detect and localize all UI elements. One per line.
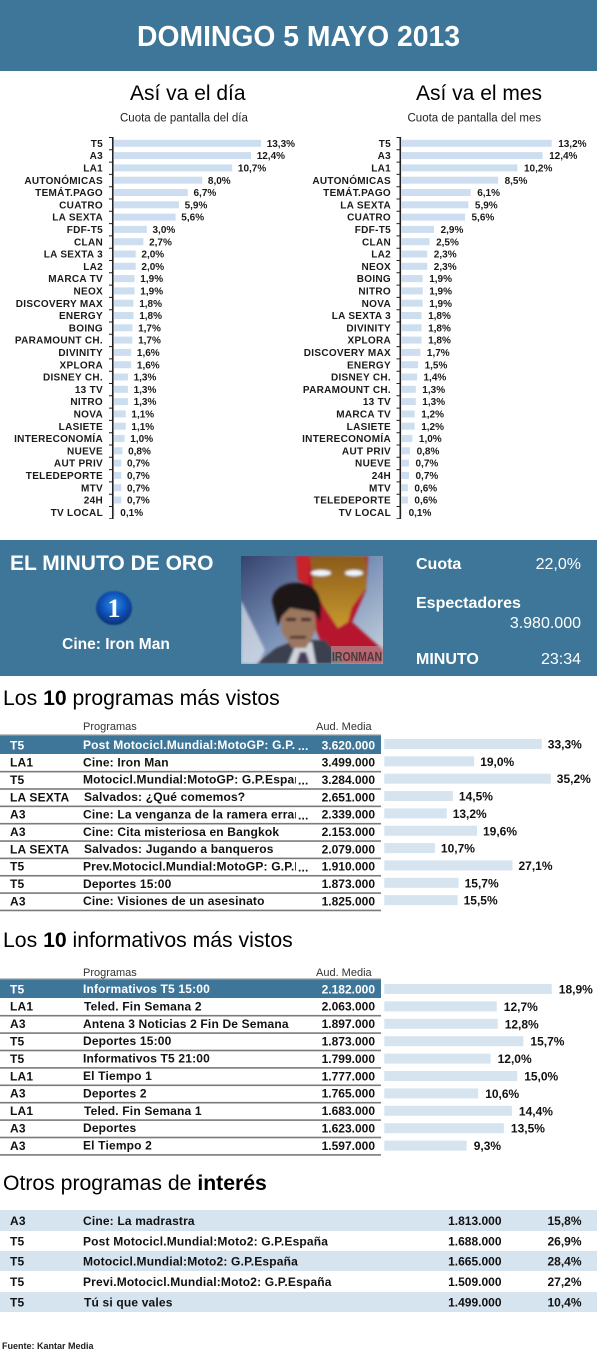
row: T5 <box>10 1254 25 1268</box>
bar chart: mes: TELEDEPORTE <box>314 496 391 507</box>
row <box>10 1234 582 1248</box>
row: Salvados: Jugando a banqueros <box>84 842 274 856</box>
bar chart: mes: TEMÁT.PAGO <box>323 186 391 199</box>
row: 1.910.000 <box>322 860 375 874</box>
row: ... <box>298 808 309 822</box>
row: T5 <box>10 773 25 787</box>
bar chart: día: 1,3% <box>134 373 157 384</box>
bar chart: mes: 1,7% <box>427 348 450 359</box>
bar chart: día: AUTONÓMICAS <box>24 174 103 187</box>
bar chart: mes: PARAMOUNT CH. <box>303 385 391 396</box>
row: T5 <box>10 877 25 891</box>
bar chart: día: 10,7% <box>238 163 266 174</box>
stat: cuota: 22,0% <box>536 556 581 573</box>
bar chart: día: TELEDEPORTE <box>26 471 103 482</box>
row <box>0 1292 597 1312</box>
bar chart: mes: 1,3% <box>422 397 445 408</box>
bar chart: mes: 2,9% <box>441 225 464 236</box>
bar chart: mes: 13 TV <box>363 397 391 408</box>
row: T5 <box>10 1296 25 1310</box>
bar chart: día: 1,1% <box>131 422 154 433</box>
bar chart: día: 13,3% <box>267 139 295 150</box>
row: 13,2% <box>453 807 487 821</box>
bar chart: día: BOING <box>69 323 103 334</box>
bar chart: mes: 2,3% <box>434 250 457 261</box>
row <box>0 824 517 842</box>
highlighted row: Post Motocicl.Mundial:MotoGP: G.P.España <box>83 738 339 752</box>
table: otros programas de interés <box>0 1210 597 1312</box>
bar chart: mes: 1,4% <box>424 373 446 384</box>
row: 1.873.000 <box>322 1034 375 1048</box>
row: 3.284.000 <box>322 773 375 787</box>
row: 2.651.000 <box>322 790 375 804</box>
table header: Aud. Media <box>316 967 373 979</box>
row <box>0 894 498 911</box>
row: Previ.Motocicl.Mundial:Moto2: G.P.España <box>83 1275 332 1289</box>
bar chart: día: PARAMOUNT CH. <box>15 336 103 347</box>
row: 26,9% <box>547 1234 582 1248</box>
icon: La 1 logo <box>96 591 132 625</box>
highlighted row: T5 <box>10 982 25 996</box>
highlighted row: 2.182.000 <box>322 982 375 996</box>
bar chart: día: MTV <box>81 483 103 494</box>
bar chart: mes <box>302 139 587 519</box>
row <box>0 999 538 1016</box>
bar chart: mes: NUEVE <box>355 459 391 470</box>
bar chart: mes: 24H <box>372 471 391 482</box>
row: Tú si que vales <box>84 1296 173 1310</box>
bar chart: mes: 0,6% <box>414 483 437 494</box>
row: Cine: Visiones de un asesinato <box>83 894 265 908</box>
bar chart: mes: 8,5% <box>505 176 528 187</box>
bar chart: día: 5,9% <box>185 200 208 211</box>
bar chart: día: LASIETE <box>59 422 103 433</box>
row: 3.499.000 <box>322 756 375 770</box>
row: 2.079.000 <box>322 842 375 856</box>
row: 15,7% <box>465 876 499 890</box>
bar chart: día: 0,7% <box>127 496 150 507</box>
row: El Tiempo 1 <box>83 1069 152 1083</box>
row: 13,5% <box>511 1122 545 1136</box>
panel: así va el mes <box>302 82 587 519</box>
row: A3 <box>10 1214 26 1228</box>
title banner: DOMINGO 5 MAYO 2013 <box>137 20 460 52</box>
bar chart: mes: 1,3% <box>422 385 445 396</box>
bar chart: mes: 13,2% <box>558 139 587 150</box>
row: 35,2% <box>557 772 591 786</box>
bar chart: mes: 1,0% <box>419 434 442 445</box>
bar chart: día: A3 <box>90 151 103 162</box>
bar chart: día: 0,7% <box>127 483 150 494</box>
bar chart: mes: MTV <box>369 483 391 494</box>
bar chart: día: XPLORA <box>60 360 103 371</box>
highlighted row: Informativos T5 15:00 <box>83 982 210 996</box>
row <box>0 1121 545 1138</box>
stat: cuota: Cuota <box>416 556 461 573</box>
row: A3 <box>10 894 26 908</box>
bar chart: mes: AUTONÓMICAS <box>312 174 391 187</box>
row: 19,0% <box>480 755 515 769</box>
row: LA SEXTA <box>10 790 70 804</box>
heading: otros programas de interés: Otros programas de interés <box>3 1172 267 1195</box>
stat: minuto: 23:34 <box>541 651 581 668</box>
bar chart: mes: 12,4% <box>549 151 578 162</box>
row: 12,0% <box>498 1052 532 1066</box>
bar chart: día: 1,8% <box>139 299 162 310</box>
bar chart: mes: LA2 <box>371 250 391 261</box>
source note: Fuente: Kantar Media <box>2 1341 95 1351</box>
bar chart: día <box>14 139 295 519</box>
row: 1.509.000 <box>448 1275 502 1289</box>
stat: minuto <box>416 651 581 668</box>
bar chart: día: TV LOCAL <box>51 508 103 519</box>
row: T5 <box>10 1052 25 1066</box>
bar chart: mes: 2,3% <box>434 262 457 273</box>
bar chart: día: 1,8% <box>139 311 162 322</box>
row: 1.813.000 <box>448 1214 502 1228</box>
row: 19,6% <box>483 824 517 838</box>
bar chart: día: TEMÁT.PAGO <box>35 186 103 199</box>
bar chart: mes: XPLORA <box>348 336 391 347</box>
row: Teled. Fin Semana 2 <box>84 999 202 1013</box>
row <box>0 876 499 894</box>
bar chart: mes: 6,1% <box>477 188 500 199</box>
row: 1.499.000 <box>448 1296 502 1310</box>
row: LA1 <box>10 1000 33 1014</box>
chart axis: mes <box>398 137 401 519</box>
bar chart: mes: INTERECONOMÍA <box>302 432 391 445</box>
bar chart: día: DISNEY CH. <box>43 373 103 384</box>
bar chart: mes: FDF-T5 <box>355 225 391 236</box>
bar chart: día: NEOX <box>73 286 103 297</box>
title banner <box>0 0 597 71</box>
row: Deportes 15:00 <box>83 1034 172 1048</box>
bar chart: día: 1,9% <box>140 286 163 297</box>
row: 1.897.000 <box>322 1017 375 1031</box>
row: 1.688.000 <box>448 1234 502 1248</box>
row <box>0 1086 520 1104</box>
heading: el minuto de oro: EL MINUTO DE ORO <box>10 552 213 575</box>
bar chart: mes: TV LOCAL <box>339 508 391 519</box>
row: 12,8% <box>505 1017 539 1031</box>
stat: cuota <box>416 556 581 573</box>
bar chart: mes: 1,8% <box>428 336 451 347</box>
table header: Programas <box>83 721 137 733</box>
row: T5 <box>10 1234 25 1248</box>
row: 1.623.000 <box>322 1121 375 1135</box>
row: 15,8% <box>547 1214 582 1228</box>
bar chart: día: 6,7% <box>194 188 216 199</box>
bar chart: mes: 5,9% <box>475 200 498 211</box>
bar chart: día: ENERGY <box>59 311 103 322</box>
row: 1.683.000 <box>322 1104 375 1118</box>
row: Deportes 15:00 <box>83 877 172 891</box>
row: 27,2% <box>547 1275 582 1289</box>
bar chart: día: DISCOVERY MAX <box>16 299 103 310</box>
table: los 10 programas más vistos <box>0 721 591 911</box>
row: 15,0% <box>524 1070 559 1084</box>
row <box>0 859 553 877</box>
bar chart: mes: DISNEY CH. <box>331 373 391 384</box>
bar chart: mes: LASIETE <box>347 422 391 433</box>
row: Cine: Iron Man <box>83 755 169 769</box>
bar chart: día: 1,6% <box>137 348 160 359</box>
row: Deportes 2 <box>83 1086 147 1100</box>
table header <box>83 967 373 979</box>
row: 15,5% <box>464 894 498 908</box>
row: A3 <box>10 1087 26 1101</box>
subheading: mes: Cuota de pantalla del mes <box>408 112 541 124</box>
bar chart: día: AUT PRIV <box>54 459 103 470</box>
row: LA SEXTA <box>10 842 70 856</box>
bar chart: mes: A3 <box>378 151 391 162</box>
highlighted row: 33,3% <box>548 738 582 752</box>
row: A3 <box>10 1139 26 1153</box>
highlighted row <box>0 978 593 998</box>
panel: así va el día <box>14 82 295 519</box>
row: 10,6% <box>485 1087 520 1101</box>
bar chart: mes: AUT PRIV <box>342 446 391 457</box>
bar chart: día: DIVINITY <box>58 348 103 359</box>
bar chart: mes: 1,2% <box>421 409 444 420</box>
row: Cine: Cita misteriosa en Bangkok <box>83 825 279 839</box>
row: 2.063.000 <box>322 1000 375 1014</box>
stat: espectadores <box>416 595 581 632</box>
row: 1.825.000 <box>322 894 375 908</box>
bar chart: día: 24H <box>84 496 103 507</box>
programme name: Cine: Iron Man <box>62 636 170 653</box>
row: ... <box>298 774 309 788</box>
bar chart: mes: 5,6% <box>472 213 494 224</box>
bar chart: día: 1,6% <box>137 360 160 371</box>
row: LA1 <box>10 756 33 770</box>
bar chart: día: LA SEXTA 3 <box>44 250 103 261</box>
bar chart: día: 0,7% <box>127 459 150 470</box>
bar chart: día: 1,0% <box>130 434 153 445</box>
bar chart: día: 12,4% <box>257 151 285 162</box>
panel: el minuto de oro <box>0 540 597 676</box>
row <box>0 1251 597 1271</box>
bar chart: día: 1,1% <box>131 409 154 420</box>
bar chart: día: 0,1% <box>120 508 143 519</box>
heading: mes: Así va el mes <box>416 82 542 105</box>
bar chart: mes: 1,8% <box>428 323 451 334</box>
row: Cine: La venganza de la ramera errante <box>83 807 313 821</box>
row: 27,1% <box>518 859 553 873</box>
row <box>0 1069 559 1086</box>
row: Antena 3 Noticias 2 Fin De Semana <box>83 1017 289 1031</box>
row <box>0 772 591 790</box>
row <box>0 1104 553 1121</box>
table: los 10 informativos más vistos <box>0 967 593 1156</box>
table header: Aud. Media <box>316 721 373 733</box>
bar chart: mes: NEOX <box>361 262 391 273</box>
bar chart: mes: CUATRO <box>347 213 391 224</box>
bar chart: día: CUATRO <box>59 200 103 211</box>
bar chart: día: NOVA <box>74 409 103 420</box>
highlighted row: ... <box>298 739 309 753</box>
bar chart: mes: DIVINITY <box>346 323 391 334</box>
stat: espectadores: 3.980.000 <box>510 615 581 632</box>
bar chart: día: LA1 <box>83 163 103 174</box>
bar chart: mes: 2,5% <box>436 237 459 248</box>
bar chart: día: 1,7% <box>138 336 161 347</box>
row: 10,4% <box>547 1296 582 1310</box>
bar chart: mes: 1,8% <box>428 311 451 322</box>
row <box>0 1017 539 1034</box>
bar chart: día: CLAN <box>74 237 103 248</box>
bar chart: mes: 1,5% <box>425 360 448 371</box>
bar chart: mes: 1,9% <box>429 274 452 285</box>
bar chart: día: 2,0% <box>141 262 164 273</box>
row: Prev.Motocicl.Mundial:MotoGP: G.P.España <box>83 859 338 873</box>
row: 1.597.000 <box>322 1139 375 1153</box>
bar chart: día: 1,3% <box>134 397 157 408</box>
table header <box>83 721 373 733</box>
bar chart: mes: 0,7% <box>416 459 438 470</box>
bar chart: mes: 0,6% <box>414 496 437 507</box>
bar chart: mes: BOING <box>357 274 391 285</box>
row: A3 <box>10 1121 26 1135</box>
row: Salvados: ¿Qué comemos? <box>84 790 245 804</box>
row: Deportes <box>83 1121 137 1135</box>
row <box>0 1052 532 1069</box>
bar chart: día: T5 <box>91 139 103 150</box>
subheading: día: Cuota de pantalla del día <box>120 112 248 124</box>
bar chart: mes: ENERGY <box>347 360 391 371</box>
row: 1.873.000 <box>322 877 375 891</box>
bar chart: mes: 0,1% <box>409 508 432 519</box>
bar chart: mes: 10,2% <box>524 163 552 174</box>
row: 1.665.000 <box>448 1254 502 1268</box>
bar chart: mes: 1,2% <box>421 422 444 433</box>
row: 1.799.000 <box>322 1052 375 1066</box>
bar chart: mes: 0,8% <box>417 446 440 457</box>
highlighted row: 3.620.000 <box>322 738 375 752</box>
bar chart: día: 1,7% <box>138 323 161 334</box>
row: 14,5% <box>459 790 493 804</box>
row: 1.765.000 <box>322 1087 375 1101</box>
row: LA1 <box>10 1069 33 1083</box>
heading: día: Así va el día <box>130 82 246 105</box>
bar chart: mes: 1,9% <box>429 286 452 297</box>
row <box>0 842 475 859</box>
chart axis: día <box>110 137 114 519</box>
bar chart: mes: MARCA TV <box>336 409 391 420</box>
bar chart: día: 1,9% <box>140 274 163 285</box>
stat: espectadores: Espectadores <box>416 595 521 612</box>
bar chart: mes: T5 <box>379 139 391 150</box>
row: A3 <box>10 808 26 822</box>
heading: los 10 programas más vistos: Los 10 programas más vistos <box>3 687 280 710</box>
highlighted row: 18,9% <box>559 982 593 996</box>
row: 9,3% <box>474 1139 501 1153</box>
bar chart: mes: NOVA <box>362 299 391 310</box>
row <box>0 790 493 807</box>
bar chart: mes: CLAN <box>362 237 391 248</box>
bar chart: día: LA2 <box>83 262 103 273</box>
image: Iron Man poster: IRONMAN <box>332 649 382 664</box>
bar chart: día: 2,7% <box>149 237 172 248</box>
row: T5 <box>10 1275 25 1289</box>
bar chart: día: NUEVE <box>67 446 103 457</box>
row <box>0 1210 597 1231</box>
bar chart: día: 8,0% <box>208 176 231 187</box>
bar chart: mes: 0,7% <box>416 471 438 482</box>
row: ... <box>298 860 309 874</box>
row: Informativos T5 21:00 <box>83 1052 210 1066</box>
row: Teled. Fin Semana 1 <box>84 1104 202 1118</box>
bar chart: día: 3,0% <box>152 225 175 236</box>
row: 12,7% <box>504 1000 538 1014</box>
row: 2.153.000 <box>322 825 375 839</box>
row: 10,7% <box>441 842 475 856</box>
bar chart: día: MARCA TV <box>48 274 103 285</box>
heading: los 10 informativos más vistos: Los 10 informativos más vistos <box>3 929 293 952</box>
image: Iron Man poster <box>241 556 383 664</box>
row: T5 <box>10 1034 25 1048</box>
row: Motocicl.Mundial:MotoGP: G.P.España <box>83 773 309 787</box>
bar chart: día: 0,7% <box>127 471 150 482</box>
stat: minuto: MINUTO <box>416 651 479 668</box>
table header: Programas <box>83 967 137 979</box>
highlighted row: T5 <box>10 738 25 752</box>
bar chart: día: 13 TV <box>75 385 103 396</box>
row: 28,4% <box>547 1254 582 1268</box>
bar chart: mes: DISCOVERY MAX <box>304 348 391 359</box>
highlighted row <box>0 734 582 754</box>
row: Motocicl.Mundial:Moto2: G.P.España <box>83 1254 298 1268</box>
row: A3 <box>10 825 26 839</box>
row: T5 <box>10 860 25 874</box>
row: 14,4% <box>519 1104 553 1118</box>
icon: La 1 logo: 1 <box>108 594 120 623</box>
row: El Tiempo 2 <box>83 1139 152 1153</box>
row: 15,7% <box>530 1035 565 1049</box>
row <box>0 755 515 772</box>
bar chart: mes: NITRO <box>358 286 391 297</box>
bar chart: día: LA SEXTA <box>52 213 103 224</box>
bar chart: mes: LA1 <box>371 163 391 174</box>
bar chart: día: 1,3% <box>134 385 157 396</box>
row <box>0 1034 565 1051</box>
bar chart: mes: LA SEXTA 3 <box>332 311 391 322</box>
bar chart: día: NITRO <box>70 397 103 408</box>
row <box>0 1139 501 1156</box>
bar chart: día: 0,8% <box>128 446 151 457</box>
row: Cine: La madrastra <box>83 1214 195 1228</box>
row: A3 <box>10 1017 26 1031</box>
row: 2.339.000 <box>322 808 375 822</box>
row <box>10 1275 582 1289</box>
row: LA1 <box>10 1104 33 1118</box>
bar chart: día: 2,0% <box>141 250 164 261</box>
bar chart: mes: LA SEXTA <box>340 200 391 211</box>
row: Post Motocicl.Mundial:Moto2: G.P.España <box>83 1234 328 1248</box>
bar chart: mes: 1,9% <box>429 299 452 310</box>
row <box>0 807 487 824</box>
row: 1.777.000 <box>322 1069 375 1083</box>
bar chart: día: FDF-T5 <box>67 225 103 236</box>
bar chart: día: INTERECONOMÍA <box>14 432 103 445</box>
bar chart: día: 5,6% <box>181 213 204 224</box>
